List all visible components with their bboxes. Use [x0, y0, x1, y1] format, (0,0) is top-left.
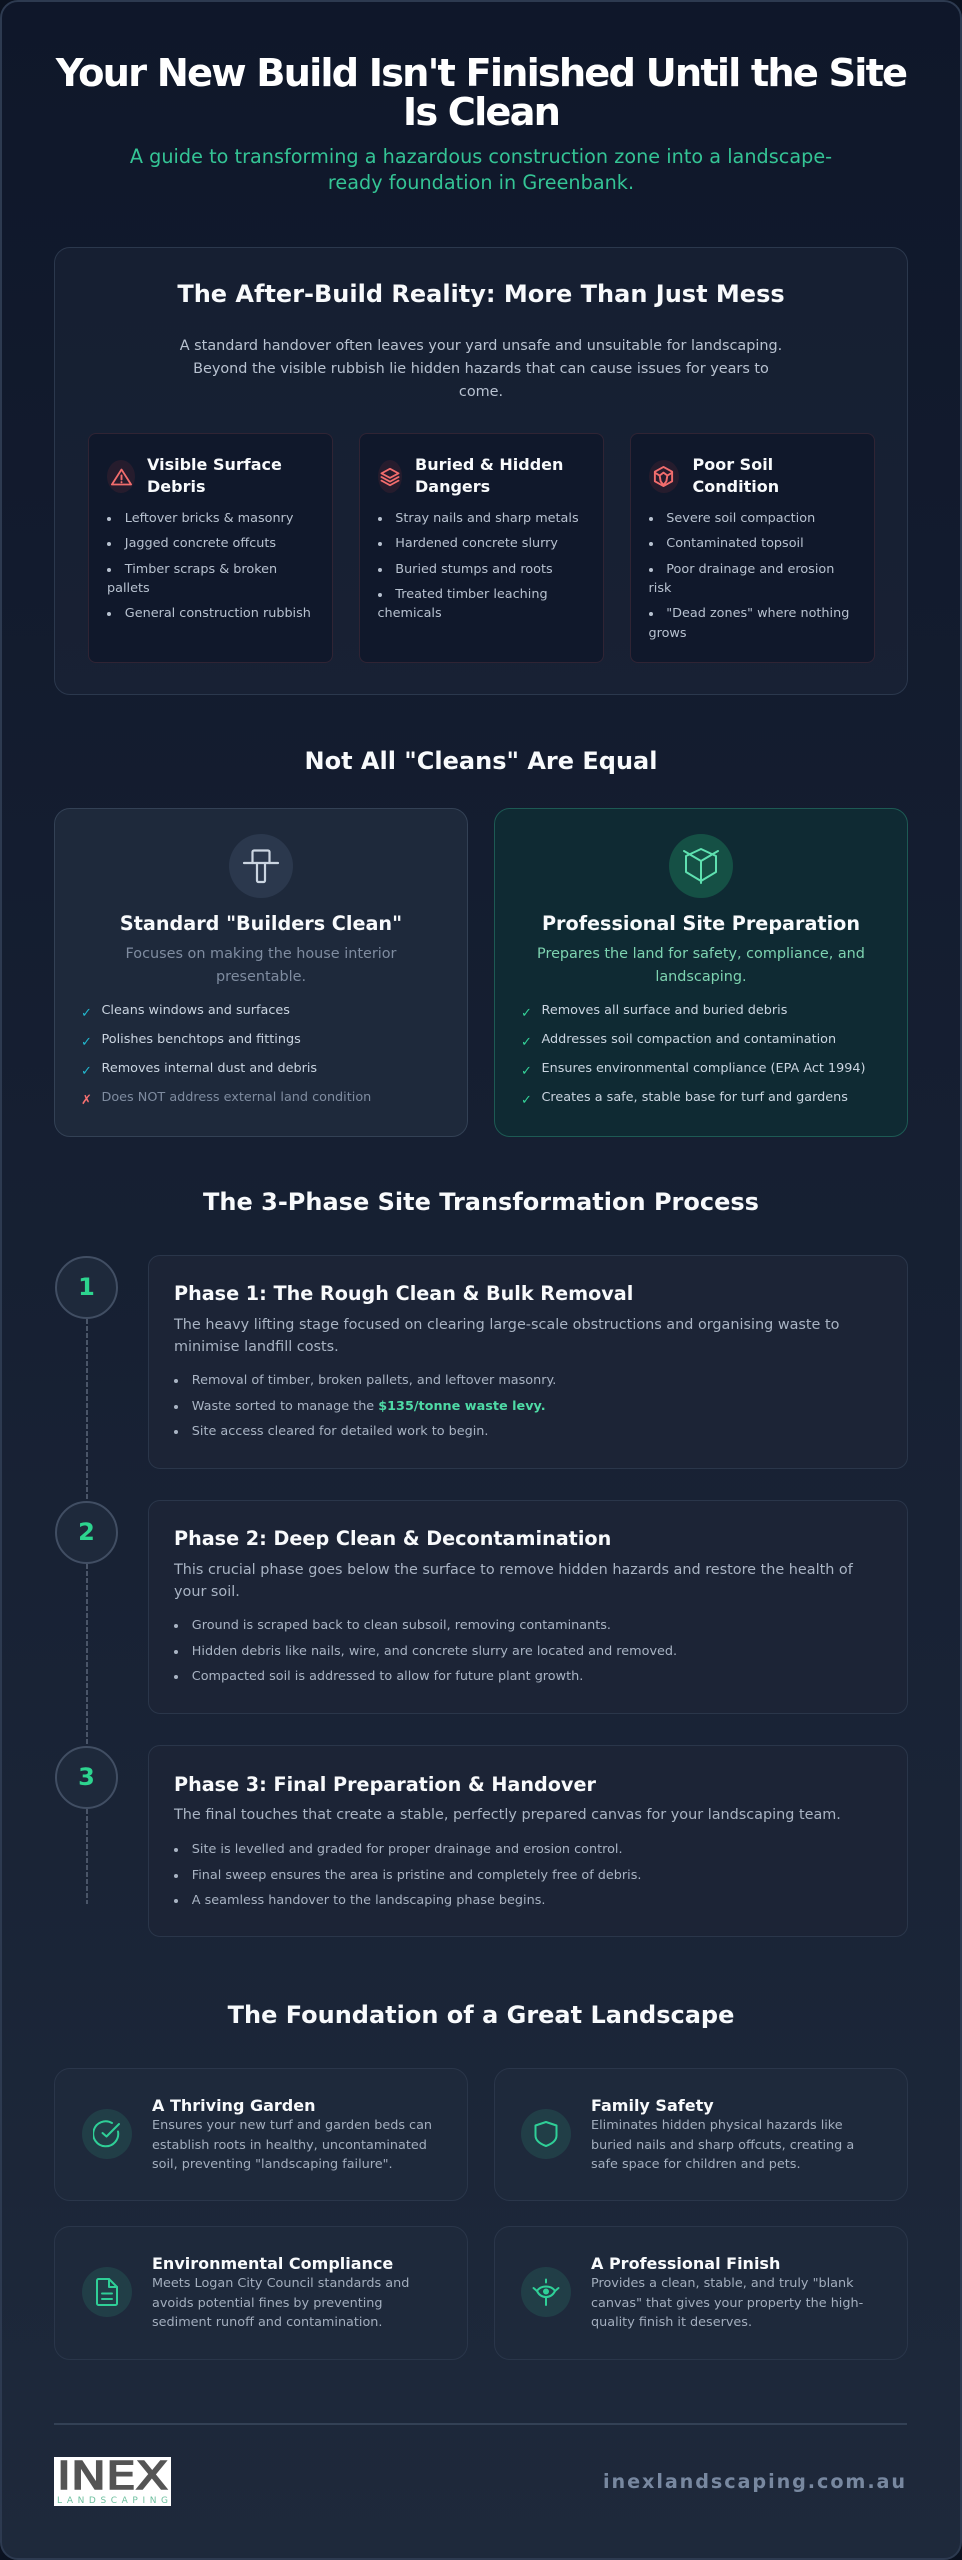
benefit text: soil, preventing "landscaping failure".	[152, 2157, 393, 2172]
card title: Visible Surface	[147, 455, 282, 474]
panel: phase 3	[148, 1745, 908, 1937]
logo: LANDSCAPING	[57, 2496, 168, 2506]
phase list: Ground is scraped back to clean subsoil, removing contaminants.	[192, 1618, 611, 1633]
benefit text: quality finish it deserves.	[591, 2315, 752, 2330]
phase list: Compacted soil is addressed to allow for future plant growth.	[192, 1669, 583, 1684]
card subtitle: Focuses on making the house interior	[126, 946, 396, 962]
footer divider	[54, 2423, 907, 2425]
card subtitle: Prepares the land for safety, compliance, and	[537, 946, 865, 962]
checklist: ✓	[521, 1092, 532, 1108]
phase list: Waste sorted to manage the $135/tonne waste levy.	[192, 1399, 546, 1414]
benefit text: establish roots in healthy, uncontaminated	[152, 2138, 427, 2153]
phase list	[174, 1618, 677, 1684]
heading: not all cleans are equal: Not All "Cleans" Are Equal	[305, 747, 657, 775]
soil list: Contaminated topsoil	[666, 536, 804, 551]
phase title: Phase 2: Deep Clean & Decontamination	[174, 1527, 611, 1550]
website url: inexlandscaping.com.au	[603, 2470, 907, 2493]
panel: phase 1	[148, 1255, 908, 1469]
phase description	[174, 1562, 854, 1600]
benefit: professional finish	[494, 2226, 908, 2360]
checklist: Cleans windows and surfaces	[102, 1002, 290, 1018]
heading: foundation of a great landscape: The Foundation of a Great Landscape	[228, 2001, 734, 2029]
subtitle	[130, 145, 832, 194]
panel: after-build reality	[54, 247, 908, 695]
checklist	[81, 1002, 371, 1108]
logo	[54, 2457, 171, 2506]
benefit text: safe space for children and pets.	[591, 2157, 801, 2172]
card title: Debris	[147, 477, 205, 496]
icon: eye	[521, 2267, 571, 2317]
benefit text	[591, 2118, 854, 2172]
checklist: ✓	[521, 1006, 532, 1020]
benefit text: Ensures your new turf and garden beds can	[152, 2118, 432, 2133]
soil list	[648, 510, 849, 641]
phase title: Phase 1: The Rough Clean & Bulk Removal	[174, 1282, 633, 1305]
checklist: ✓	[81, 1006, 92, 1020]
benefit text: Eliminates hidden physical hazards like	[591, 2118, 843, 2133]
benefit: environmental compliance	[54, 2226, 468, 2360]
benefit text: buried nails and sharp offcuts, creating a	[591, 2138, 854, 2153]
checklist: Polishes benchtops and fittings	[102, 1032, 301, 1046]
panel: phase 2	[148, 1500, 908, 1714]
benefit text	[152, 2118, 432, 2172]
phase list: Final sweep ensures the area is pristine and completely free of debris.	[192, 1868, 641, 1883]
card title: Dangers	[415, 477, 490, 496]
checklist: Creates a safe, stable base for turf and gardens	[542, 1090, 848, 1104]
phase list: Site access cleared for detailed work to begin.	[192, 1424, 488, 1439]
phase list: Site is levelled and graded for proper drainage and erosion control.	[192, 1842, 623, 1857]
icon: layers	[378, 460, 402, 493]
connector line 1	[86, 1319, 88, 1501]
icon: document	[82, 2267, 132, 2317]
step number 2: 2	[78, 1518, 95, 1546]
phase description: The heavy lifting stage focused on clearing large-scale obstructions and organising waste to	[174, 1317, 839, 1333]
checklist: ✓	[81, 1034, 92, 1050]
icon: box	[669, 834, 733, 898]
debris list: Jagged concrete offcuts	[125, 536, 276, 551]
checklist: Ensures environmental compliance (EPA Act 1994)	[542, 1060, 866, 1076]
soil list: Severe soil compaction	[666, 510, 815, 526]
card: visible surface debris	[88, 433, 333, 663]
icon: warning triangle	[107, 460, 135, 493]
checklist: ✗	[81, 1092, 92, 1108]
card title	[415, 455, 563, 496]
panel heading: The After-Build Reality: More Than Just Mess	[177, 280, 785, 308]
benefit: family safety	[494, 2068, 908, 2201]
checklist: ✓	[521, 1034, 532, 1050]
icon: shield	[521, 2109, 571, 2159]
title: Is Clean	[403, 90, 559, 135]
phase list: Removal of timber, broken pallets, and leftover masonry.	[192, 1373, 556, 1388]
panel intro text: come.	[459, 384, 503, 400]
benefit text	[591, 2276, 863, 2330]
connector line 2	[86, 1564, 88, 1746]
debris list: Timber scraps & broken pallets	[107, 562, 277, 596]
step number 1	[55, 1256, 118, 1319]
checklist: Does NOT address external land condition	[102, 1090, 371, 1104]
card title: Poor Soil	[692, 455, 773, 474]
step number 3: 3	[78, 1763, 95, 1791]
debris list: General construction rubbish	[125, 606, 311, 621]
heading: 3-phase process: The 3-Phase Site Transformation Process	[203, 1188, 759, 1216]
dangers list: Treated timber leaching chemicals	[378, 587, 548, 621]
phase description: This crucial phase goes below the surface to remove hidden hazards and restore the health of	[174, 1562, 853, 1578]
subtitle: ready foundation in Greenbank.	[328, 171, 634, 194]
benefit: thriving garden	[54, 2068, 468, 2201]
card title: Professional Site Preparation	[542, 912, 860, 934]
title: Your New Build Isn't Finished Until the Site	[56, 51, 906, 96]
soil list: Poor drainage and erosion risk	[648, 562, 834, 596]
phase description: minimise landfill costs.	[174, 1339, 339, 1355]
phase list: A seamless handover to the landscaping phase begins.	[192, 1893, 545, 1908]
checklist: ✓	[81, 1064, 92, 1078]
debris list	[107, 510, 311, 621]
card subtitle	[126, 946, 396, 985]
phase list	[174, 1842, 641, 1908]
benefit text	[152, 2276, 409, 2330]
checklist: Removes all surface and buried debris	[542, 1002, 787, 1018]
title	[55, 51, 906, 135]
step number 2	[55, 1501, 118, 1564]
card subtitle	[537, 946, 865, 985]
benefit text: canvas" that gives your property the high-	[591, 2296, 863, 2311]
checklist: Removes internal dust and debris	[102, 1060, 317, 1076]
benefit title: A Thriving Garden	[152, 2096, 315, 2115]
card subtitle: presentable.	[216, 969, 306, 985]
panel: standard builders clean	[54, 808, 468, 1137]
card: buried and hidden dangers	[358, 433, 604, 663]
phase description: your soil.	[174, 1584, 240, 1600]
benefit title: A Professional Finish	[591, 2254, 780, 2273]
benefit text: Meets Logan City Council standards and	[152, 2276, 409, 2291]
card title: Buried & Hidden	[415, 455, 563, 474]
panel intro text	[180, 338, 782, 400]
subtitle: A guide to transforming a hazardous construction zone into a landscape-	[130, 145, 832, 168]
soil list: "Dead zones" where nothing grows	[648, 606, 849, 641]
checklist: ✓	[521, 1064, 532, 1078]
debris list: Leftover bricks & masonry	[125, 510, 293, 526]
dangers list	[378, 510, 579, 621]
card title: Standard "Builders Clean"	[120, 912, 402, 934]
icon: check circle	[82, 2109, 132, 2159]
checklist	[521, 1002, 866, 1108]
card title: Condition	[692, 477, 779, 496]
benefit text: Provides a clean, stable, and truly "blank	[591, 2276, 854, 2291]
benefit text: avoids potential fines by preventing	[152, 2296, 383, 2311]
benefit title: Environmental Compliance	[152, 2254, 393, 2273]
card subtitle: landscaping.	[655, 969, 747, 985]
dangers list: Hardened concrete slurry	[395, 536, 558, 551]
timeline	[55, 1256, 118, 1904]
phase title: Phase 3: Final Preparation & Handover	[174, 1773, 596, 1796]
benefit text: sediment runoff and contamination.	[152, 2315, 382, 2330]
step number 1: 1	[78, 1273, 95, 1301]
benefit title: Family Safety	[591, 2096, 714, 2115]
phase description	[174, 1317, 839, 1355]
card title	[692, 455, 779, 496]
connector line 3	[86, 1809, 88, 1904]
phase description: The final touches that create a stable, perfectly prepared canvas for your landscaping team.	[174, 1807, 841, 1823]
panel intro text: A standard handover often leaves your yard unsafe and unsuitable for landscaping.	[180, 338, 782, 354]
icon: brush	[229, 834, 293, 898]
icon: soil cube	[648, 460, 678, 493]
card: poor soil condition	[630, 433, 875, 663]
panel: professional site preparation	[494, 808, 908, 1137]
step number 3	[55, 1746, 118, 1809]
card title	[147, 455, 282, 496]
dangers list: Buried stumps and roots	[395, 562, 553, 577]
dangers list: Stray nails and sharp metals	[395, 510, 579, 526]
phase list	[174, 1373, 556, 1439]
panel intro text: Beyond the visible rubbish lie hidden hazards that can cause issues for years to	[193, 361, 769, 377]
phase list: Hidden debris like nails, wire, and concrete slurry are located and removed.	[192, 1644, 677, 1659]
checklist: Addresses soil compaction and contamination	[542, 1032, 836, 1046]
